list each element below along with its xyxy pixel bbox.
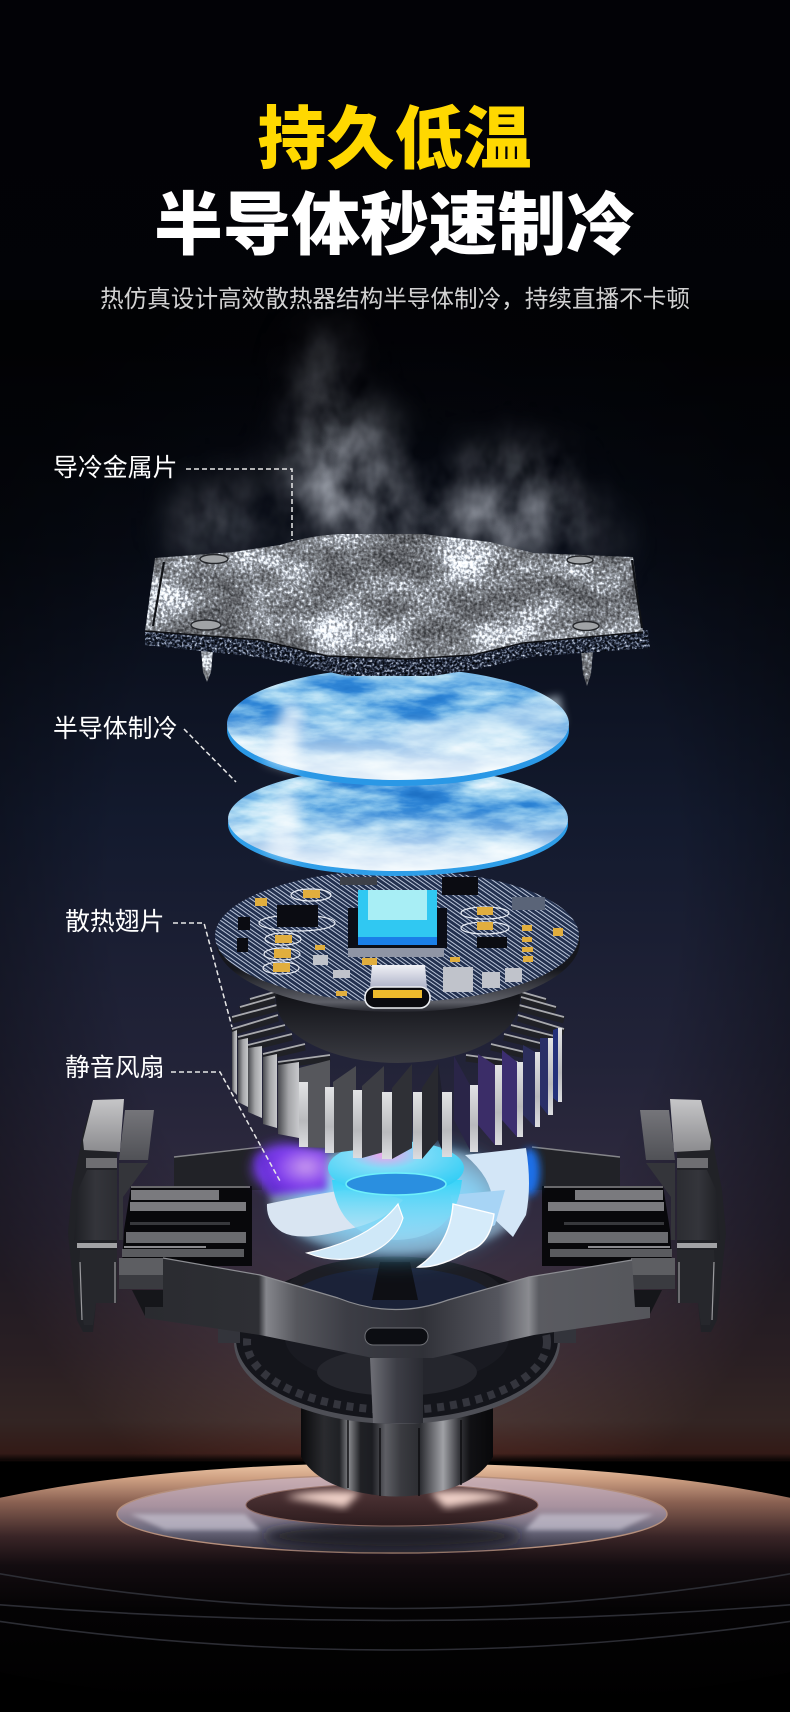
callout: 散热翅片: 散热翅片 [65,908,165,936]
ice disc: lower [228,767,568,876]
ice disc: upper [227,668,569,786]
fin side panels [299,1028,558,1159]
front V bracket [145,1258,650,1423]
bracket post [370,1358,423,1423]
title: yellow line: 持久低温 [257,101,532,178]
cooling fan with glow [253,1141,540,1267]
heat sink dome [276,937,520,1063]
fan blade: right [465,1148,529,1237]
stage inner disc [117,1475,667,1553]
stage center mirror disc [246,1484,538,1526]
phone holder back arm: left [119,1147,262,1316]
callout: 静音风扇: 静音风扇 [65,1054,165,1082]
plate pin: left [201,650,213,682]
callout: 导冷金属片 [53,454,292,540]
main chip frame [348,908,447,948]
steam cloud above metal plate [178,330,618,565]
mirror highlights [285,1491,510,1508]
fan glow: cyan [290,1150,500,1250]
lower vent ring [218,1259,576,1424]
board rim [216,870,580,1012]
disc silver streaks [130,1514,654,1530]
plate underside edge [145,630,650,676]
yellow components [255,890,563,996]
bracket slot [365,1328,428,1345]
phone holder back arm: right [532,1147,675,1316]
circuit board [215,870,580,1012]
fan right fill [450,1190,505,1240]
ice streak [265,790,300,860]
ice diagonal streak [395,695,565,750]
fan translucent sweep [270,1145,526,1255]
upper fan ring [285,1262,501,1338]
stage disc shadow [262,1522,522,1550]
title: white line: 半导体秒速制冷 [154,187,635,264]
silver small parts [313,955,522,992]
callout: 半导体制冷 [53,715,236,782]
board surface [215,870,579,1002]
callout: 静音风扇 [65,1054,280,1181]
callout: 导冷金属片: 导冷金属片 [53,454,177,482]
fan blade: bottom [418,1204,494,1267]
plate side slots [153,560,642,628]
callout: 半导体制冷: 半导体制冷 [53,715,177,743]
component outline rings [259,889,509,974]
plate pin: right [581,650,593,686]
fan blade: lower left [307,1204,403,1259]
screw heads [191,554,599,630]
radial fin tops: left [232,989,330,1065]
wide left fin faces [232,1030,299,1138]
fan hub inner [346,1173,446,1195]
black components [237,877,545,952]
fan glow: blue [520,1148,540,1196]
plate front seam [145,631,643,659]
fan hub top [328,1141,464,1195]
fan hub skirt [332,1180,462,1240]
glowing chip [358,890,437,945]
cylindrical base mount [301,1405,493,1496]
ice streak [265,700,305,770]
fan blade: left [267,1190,403,1237]
subtitle: 热仿真设计高效散热器结构半导体制冷，持续直播不卡顿 [100,286,690,313]
plate top face [145,534,643,659]
chip pins [348,948,444,957]
fan glow: purple [253,1144,317,1192]
fan blade: purple [256,1148,327,1195]
lower rim rings [0,1572,790,1650]
USB-C port [365,965,430,1008]
lit fin faces [299,1028,562,1159]
stage: glowing round platform [0,1463,790,1707]
clamp: left [68,1099,154,1332]
heat sink fins [232,989,564,1159]
clamp: right [640,1099,726,1332]
radial fin tops: right [466,989,564,1065]
callout: 散热翅片 [65,908,232,1027]
frosted metal plate [145,534,650,686]
